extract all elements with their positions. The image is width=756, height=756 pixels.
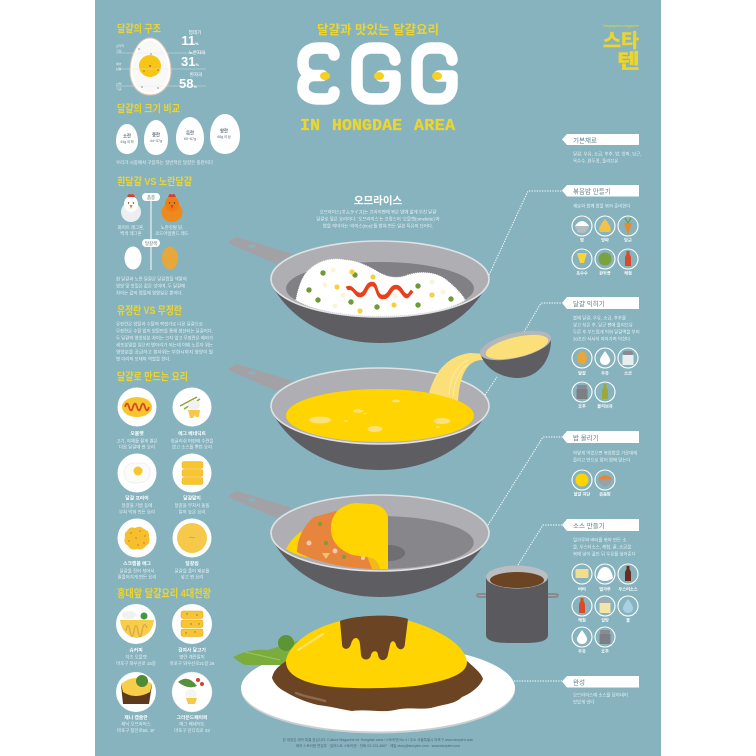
egg: small: 44g 이하 bbox=[120, 139, 134, 144]
text: 하얗게 익었으면 볶음밥을 가운데에 bbox=[573, 450, 637, 456]
panel: cook the egg: 두른 후 부드럽게 익혀 달걀액을 부어 bbox=[573, 328, 640, 336]
caption: brown hen: 로드아일랜드 레드 bbox=[155, 230, 189, 237]
ingredient: carrot: 당근 bbox=[624, 236, 632, 242]
pouring stream bbox=[429, 353, 487, 401]
pot body bbox=[486, 577, 548, 643]
dish: egg roll: 달걀말이 bbox=[183, 494, 201, 502]
text block: 두 달걀의 영양성분 차이는 크지 않고 무정란은 배아가 bbox=[116, 334, 213, 342]
egg: medium: 44~57g bbox=[150, 139, 162, 143]
egg edge bbox=[286, 529, 310, 558]
text block: 유정란은 암탉과 수탉의 짝짓기로 나온 달걀으로 bbox=[116, 320, 203, 328]
text block: 무정란은 수탉 없이 암탉만을 통해 생산되는 달걀이다. bbox=[116, 328, 213, 334]
pill: breed: 품종 bbox=[147, 195, 155, 200]
pill: egg colour: 달걀색 bbox=[145, 240, 157, 247]
folded egg underside bbox=[367, 556, 388, 569]
title egg-yolk dots bbox=[320, 72, 442, 80]
statistic: yolk: 31% bbox=[181, 54, 199, 69]
panel: place the rice bbox=[562, 431, 639, 498]
restaurant: curry omelet: 제니 캡슐란 bbox=[124, 714, 148, 721]
dish: thin egg sheet: 달걀찜 bbox=[185, 560, 199, 567]
statistic: shell bbox=[181, 29, 201, 48]
restaurant: egg roll bbox=[170, 604, 215, 667]
restaurant: omelet with rice: 슈커피 bbox=[129, 646, 143, 654]
ingredient: milk: 우유 bbox=[578, 648, 586, 654]
restaurant: omelet with rice bbox=[116, 604, 156, 667]
heading: 유정란 VS 무정란 bbox=[117, 304, 182, 317]
text block bbox=[116, 276, 187, 296]
dish: omelet bbox=[116, 388, 158, 450]
pot rim bbox=[486, 566, 548, 588]
pot of sauce bbox=[477, 566, 558, 643]
ingredient: salt: 소금 bbox=[624, 370, 632, 376]
dish: scrambled egg: 잘풀어지게 만든 요리 bbox=[118, 574, 156, 580]
restaurant: egg roll: 마포구 와우산로21길 26 bbox=[170, 660, 215, 667]
icon: white egg bbox=[124, 246, 142, 270]
egg: extra large: 68g 이상 bbox=[217, 134, 231, 139]
faint corn flecks bbox=[322, 268, 446, 308]
dish description: 밥을 의미하는 '라이스(rice)'를 합쳐 만든 일본 특유의 단어다. bbox=[323, 222, 433, 230]
omelet bbox=[286, 617, 467, 688]
title tagline: IN bbox=[300, 116, 320, 135]
panel: egg structure bbox=[116, 22, 206, 95]
pan body bbox=[228, 237, 489, 343]
tag: 소스 만들기 bbox=[573, 521, 605, 530]
pan 1: rice bbox=[228, 194, 489, 343]
footer credits bbox=[283, 737, 473, 748]
ingredient: rice: 밥 bbox=[580, 236, 584, 242]
pan floor bbox=[286, 262, 474, 315]
ingredient: pepper: 후추 bbox=[578, 402, 586, 410]
egg: large: 특란 bbox=[186, 130, 194, 136]
pot handles bbox=[477, 594, 558, 597]
statistic: yolk bbox=[181, 49, 205, 69]
panel: finish bbox=[562, 676, 639, 706]
panel: cook the egg bbox=[562, 297, 640, 410]
panel: fertilized vs unfertilized bbox=[116, 304, 213, 362]
title: EGG bbox=[303, 48, 452, 99]
dish: scrambled egg: 스크램블 에그 bbox=[123, 560, 151, 567]
title tagline: HONGDAE bbox=[332, 116, 402, 135]
statistic: shell: 껍데기 bbox=[189, 29, 201, 36]
folded egg bbox=[331, 503, 388, 569]
text block: 세포분열을 일으켜 병아리가 되는데 이때 노른자 위는 bbox=[116, 342, 213, 348]
ingredient: peas: 완두콩 bbox=[599, 270, 611, 276]
egg part tiny labels: 기실 bbox=[116, 48, 122, 53]
restaurant: salad and egg: 그라운드페이퍼 bbox=[177, 714, 207, 721]
ingredient: milk: 우유 bbox=[601, 370, 609, 376]
pan body bbox=[228, 491, 489, 597]
pan 2: pouring egg bbox=[228, 325, 554, 470]
caption: brown hen: 노란깃털 닭, bbox=[161, 224, 183, 231]
statistic: white: 흰자의 bbox=[190, 71, 202, 78]
pan body bbox=[228, 364, 489, 470]
dish: omelet: 고기, 야채를 잘게 썰은 bbox=[116, 438, 158, 444]
dish: eggs benedict bbox=[171, 388, 213, 450]
restaurant: salad and egg: 마포구 잔다리로 33 bbox=[174, 727, 210, 734]
dish: egg roll: 말아 놓은 요리 bbox=[179, 508, 205, 516]
panel: egg size comparison bbox=[116, 102, 240, 166]
panel: make the sauce: 볶에 넣어 끓인 뒤 우유를 넣어준다 bbox=[573, 550, 636, 558]
panel: basic ingredients: 옥수수, 완두콩, 돌리브유 bbox=[573, 158, 618, 164]
dish: thin egg sheet: 넣고 찐 요리 bbox=[181, 574, 203, 580]
dish: eggs benedict: 에그 베네딕트 bbox=[178, 430, 206, 437]
dish description: 오므라이스(オムライス)는 프라이팬에 볶은 밥에 얇게 부친 달걀 bbox=[320, 208, 436, 216]
dish: omelet: 다음 달걀에 싼 요리 bbox=[119, 444, 155, 450]
plate bbox=[241, 646, 515, 734]
egg mixture bbox=[286, 389, 474, 442]
ingredient: water: 물 bbox=[626, 618, 630, 624]
panel: make the sauce bbox=[562, 519, 639, 654]
panel: dishes made with egg bbox=[116, 370, 213, 580]
caption: white hen: 백색 레그혼 bbox=[120, 230, 142, 237]
caption: white hen: 화이트 레그혼, bbox=[118, 224, 144, 231]
omelet highlight bbox=[298, 634, 323, 650]
heading: 달걀로 만드는 요리 bbox=[117, 370, 188, 383]
text: 달걀, 우유, 소금, 후추, 밥, 양파, 당근, bbox=[573, 150, 641, 158]
egg part tiny labels: 기공 bbox=[116, 86, 122, 91]
sauce bbox=[490, 572, 544, 588]
restaurant: salad and egg: 에그 베네딕트 bbox=[179, 720, 205, 728]
footer credits: 본 대장은 제작 특별 호입니다. Culture Magazine for Hongdae area / 스토리텐 No.4 / 주소 서울특별시 마포구 www.storyten.com bbox=[283, 737, 473, 742]
ingredient: egg sheet: 달걀 지단 bbox=[574, 490, 590, 498]
egg: small: 소란 bbox=[123, 132, 131, 138]
restaurant: omelet with rice: 마포구 와우산로 15길 bbox=[116, 660, 156, 667]
heading: 달걀의 구조 bbox=[117, 22, 161, 35]
dotted leader lines bbox=[485, 191, 562, 681]
title tagline: AREA bbox=[414, 116, 455, 135]
text block: 흰 달걀과 노란 달걀은 달걀껍질 색깔의 bbox=[116, 276, 187, 282]
dish: omelet: 오믈렛 bbox=[130, 430, 144, 437]
pan centre bbox=[388, 545, 405, 561]
heading: 홍대앞 달걀요리 4대천왕 bbox=[117, 586, 211, 600]
egg: medium bbox=[144, 120, 168, 155]
restaurant: egg roll: 명란 계란말이 bbox=[179, 654, 205, 660]
egg: small bbox=[116, 124, 138, 154]
dish description: 달걀로 덮은 요리이다. '오므라이스'는 프랑스어 '오믈렛(omelette)'과 bbox=[316, 216, 440, 222]
panel: place the rice: 올리고 반으로 접어 밥에 덮는다 bbox=[573, 456, 630, 464]
text: 재료와 함께 밥을 볶아 준비한다 bbox=[573, 202, 630, 210]
text block: 영양분을 공급하고 흰자위는 부화시까지 영양이 될 bbox=[116, 348, 213, 356]
dish title: 오므라이스 bbox=[354, 194, 402, 207]
dish description bbox=[316, 208, 440, 230]
heading: 흰달걀 VS 노란달걀 bbox=[117, 175, 192, 188]
ingredient: ketchup: 케첩 bbox=[578, 616, 586, 624]
restaurant: curry omelet bbox=[116, 672, 156, 734]
text: 밀가루와 버터를 볶아 만든 소 bbox=[573, 536, 626, 544]
text: 볼에 달걀, 우유, 소금, 후추를 bbox=[573, 314, 626, 322]
ingredient: ketchup: 케첩 bbox=[624, 270, 632, 276]
restaurant: curry omelet: 마포구 창전로50, 1F bbox=[117, 727, 155, 734]
statistic: shell: 11% bbox=[181, 33, 199, 48]
dish: eggs benedict: 얹고 소스를 뿌린 요리 bbox=[172, 444, 212, 450]
divider line bbox=[150, 197, 152, 270]
panel: Hongdae top four bbox=[116, 586, 215, 734]
egg: large: 60~67g bbox=[184, 137, 196, 141]
statistic: white bbox=[179, 71, 202, 91]
text block: 병 아리의 모태의 역할을 한다. bbox=[116, 356, 171, 362]
subtitle: 달걀과 맛있는 달걀요리 bbox=[317, 22, 439, 37]
ingredient: butter: 버터 bbox=[578, 586, 586, 592]
restaurant: salad and egg bbox=[172, 672, 212, 734]
fried rice bbox=[296, 259, 465, 316]
tag: 기본재료 bbox=[573, 135, 597, 144]
text block bbox=[116, 320, 213, 362]
panel: cook the egg: 30초간 서서히 저어가며 익힌다 bbox=[573, 336, 630, 342]
icon: brown egg bbox=[162, 246, 178, 270]
sauce highlight bbox=[296, 693, 325, 701]
statistic: white: 58% bbox=[179, 76, 197, 91]
egg part tiny labels: 난황 bbox=[116, 66, 122, 71]
panel: basic ingredients bbox=[562, 134, 641, 164]
note: 우리가 시중에서 구입하는 일반적인 달걀은 중란이다 bbox=[116, 159, 213, 166]
dish: egg roll: 달걀을 부쳐서 돌돌 bbox=[175, 502, 209, 509]
ingredient: worcestershire sauce: 우스터소스 bbox=[618, 586, 638, 592]
restaurant: omelet with rice: 치즈 오믈렛 bbox=[125, 654, 147, 660]
panel: white egg vs brown egg bbox=[116, 175, 192, 296]
background panel bbox=[95, 0, 661, 756]
title block bbox=[300, 22, 455, 135]
icon: brown hen bbox=[162, 194, 182, 222]
dish: egg roll bbox=[172, 454, 212, 516]
egg part tiny labels: 난각막 bbox=[116, 43, 125, 48]
ingredient: flour: 밀가루 bbox=[599, 586, 611, 592]
dish: fried egg bbox=[118, 454, 156, 516]
tag: 완성 bbox=[573, 678, 585, 686]
garnish bbox=[233, 635, 300, 665]
panel: make the sauce: 을, 우스터소스, 케첩, 꿀, 소금을 bbox=[573, 544, 631, 550]
egg highlights bbox=[309, 400, 450, 432]
egg part tiny labels: 배아 bbox=[116, 61, 122, 66]
stream highlights bbox=[449, 360, 468, 397]
ingredient: pepper: 후추 bbox=[601, 648, 609, 654]
panel: finish: 맛있게 낸다 bbox=[573, 698, 594, 706]
egg: large bbox=[176, 117, 204, 155]
logo: 스타 bbox=[603, 30, 640, 52]
egg: extra large: 왕란 bbox=[220, 128, 228, 134]
logo: 텐 bbox=[617, 50, 640, 73]
egg part tiny labels: 난백 bbox=[116, 81, 122, 86]
logo: infographics magazine bbox=[603, 24, 639, 28]
dish: thin egg sheet: 달걀을 풀어 재료를 bbox=[175, 568, 209, 574]
restaurant: curry omelet: 제닉 오므라이스 bbox=[121, 720, 151, 728]
ingredient: fried rice: 볶음밥 bbox=[599, 490, 611, 498]
pan 3: folded omelet bbox=[228, 491, 489, 597]
text block: 영양 및 맛밀은 같은 것이며, 두 달걀에 bbox=[116, 282, 185, 290]
ladle bbox=[477, 325, 554, 378]
egg: medium: 중란 bbox=[152, 132, 160, 138]
corn bbox=[334, 269, 435, 314]
ingredient: egg: 달걀 bbox=[578, 370, 586, 376]
dish: scrambled egg: 달걀을 젓어 섞어서 bbox=[120, 568, 154, 574]
restaurant: egg roll: 김여사 달고기 bbox=[178, 646, 206, 654]
pan floor (right half) bbox=[388, 516, 474, 569]
ketchup on pan 1 rice bbox=[346, 282, 413, 299]
dish: scrambled egg bbox=[118, 518, 156, 580]
sauce on top bbox=[340, 616, 408, 660]
panel: fried rice bbox=[562, 185, 639, 276]
heading: 달걀의 크기 비교 bbox=[117, 102, 180, 115]
fried rice bbox=[297, 511, 372, 569]
panel: cook the egg: 넣고 섞은 후, 달군 팬에 올리브유 bbox=[573, 322, 633, 328]
egg: extra large bbox=[210, 114, 240, 154]
logo bbox=[603, 24, 640, 73]
text block: 차이는 겉의 껍질에 영향일은 뿐이다. bbox=[116, 290, 183, 296]
dish: fried egg: 달걀을 기름 등에 bbox=[122, 502, 152, 509]
dish: fried egg: 부쳐 익혀 만든 요리 bbox=[119, 508, 155, 516]
tag: 밥 올리기 bbox=[573, 433, 599, 442]
ingredient: olive oil: 올리브유 bbox=[597, 402, 613, 410]
title tagline bbox=[300, 116, 455, 135]
egg part tiny labels bbox=[116, 43, 125, 91]
caption: white hen bbox=[118, 224, 144, 237]
egg cross-section bbox=[116, 38, 206, 95]
tag: 볶음밥 만들기 bbox=[573, 186, 611, 196]
text: 오므라이스에 소스를 담아내어 bbox=[573, 692, 628, 698]
finished omurice plate bbox=[233, 616, 515, 734]
dish: eggs benedict: 잉글리쉬 머핀에 수란을 bbox=[171, 438, 213, 444]
ingredient: sugar: 설탕 bbox=[601, 616, 609, 622]
tag: 달걀 익히기 bbox=[573, 299, 605, 308]
caption: brown hen bbox=[155, 224, 189, 237]
ingredient: onion: 양파 bbox=[601, 236, 609, 244]
footer credits: 제작 스토리텐 편집부 · 일러스트 스토리텐 · 전화 02-123-4567 · 메일 story@storyten.com · www.storyten.com bbox=[296, 743, 460, 748]
dish: thin egg sheet bbox=[172, 518, 212, 580]
statistic: yolk: 노른자의 bbox=[189, 49, 205, 56]
icon: white hen bbox=[121, 194, 141, 222]
brown sauce bbox=[272, 660, 483, 711]
peas bbox=[306, 270, 454, 310]
dish: fried egg: 달걀 프라이 bbox=[125, 494, 149, 502]
rice bits bbox=[306, 522, 365, 560]
ingredient: corn: 옥수수 bbox=[576, 270, 588, 276]
